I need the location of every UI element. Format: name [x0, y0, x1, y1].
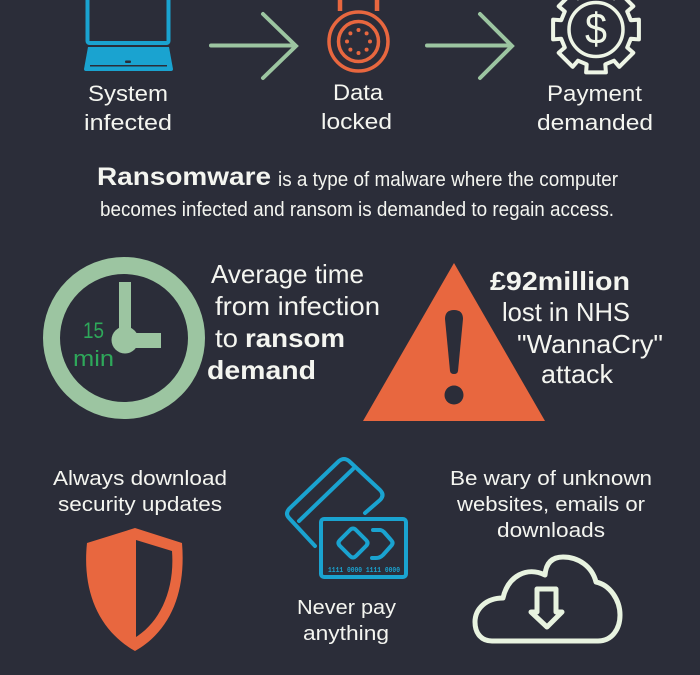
clock label: 15 min — [73, 318, 114, 371]
label: never pay anything: anything — [303, 623, 389, 645]
icon: dollar gear: $ — [585, 4, 607, 54]
card number: 1111 0000 1111 0000 — [328, 567, 400, 575]
label: data locked: locked — [321, 109, 392, 134]
text: ransomware definition: Ransomware — [97, 163, 271, 191]
text: be wary of unknown — [450, 468, 652, 542]
label: system infected — [84, 81, 172, 135]
icon: warning triangle — [363, 263, 545, 421]
icon: cloud download — [475, 557, 620, 641]
icon: dollar gear — [553, 0, 639, 72]
text: average time: demand — [207, 355, 316, 385]
icon: laptop — [84, 0, 173, 71]
icon: padlock — [329, 0, 388, 71]
text: average time: from infection — [215, 291, 380, 321]
text: ransomware definition: is a type of malware where the computer — [278, 169, 618, 191]
text: be wary of unknown: websites, emails or — [456, 494, 645, 516]
label: system infected: infected — [84, 110, 172, 135]
text: NHS WannaCry loss: lost in NHS — [502, 297, 630, 327]
text: NHS WannaCry loss: attack — [541, 359, 614, 389]
text: ransomware definition: becomes infected and ransom is demanded to regain access. — [100, 199, 614, 221]
text: be wary of unknown: Be wary of unknown — [450, 468, 652, 490]
icon: shield — [86, 528, 183, 651]
text: always download security updates: Always download — [53, 468, 227, 490]
label: system infected: System — [88, 81, 168, 106]
text: average time — [207, 259, 380, 385]
label: never pay anything — [297, 597, 396, 645]
icon: credit cards — [287, 459, 406, 577]
text: NHS WannaCry loss: £92million — [490, 266, 630, 296]
clock label: 15 min: min — [73, 346, 114, 371]
text: always download security updates: security updates — [58, 494, 222, 516]
label: never pay anything: Never pay — [297, 597, 396, 619]
text: be wary of unknown: downloads — [497, 520, 605, 542]
text: ransomware definition — [97, 163, 618, 221]
text: average time: ransom — [245, 323, 345, 353]
text: NHS WannaCry loss: "WannaCry" — [517, 329, 663, 359]
text: average time: Average time — [211, 259, 364, 289]
label: payment demanded: demanded — [537, 110, 653, 135]
label: data locked: Data — [333, 80, 384, 105]
label: payment demanded — [537, 81, 653, 135]
text: average time: to — [215, 323, 238, 353]
text: always download security updates — [53, 468, 227, 516]
clock label: 15 min: 15 — [83, 318, 104, 343]
label: data locked — [321, 80, 392, 134]
icon: clock — [52, 266, 196, 410]
label: payment demanded: Payment — [547, 81, 642, 106]
arrow: locked to payment — [427, 14, 512, 78]
text: NHS WannaCry loss — [490, 266, 663, 389]
arrow: infected to locked — [211, 14, 296, 78]
